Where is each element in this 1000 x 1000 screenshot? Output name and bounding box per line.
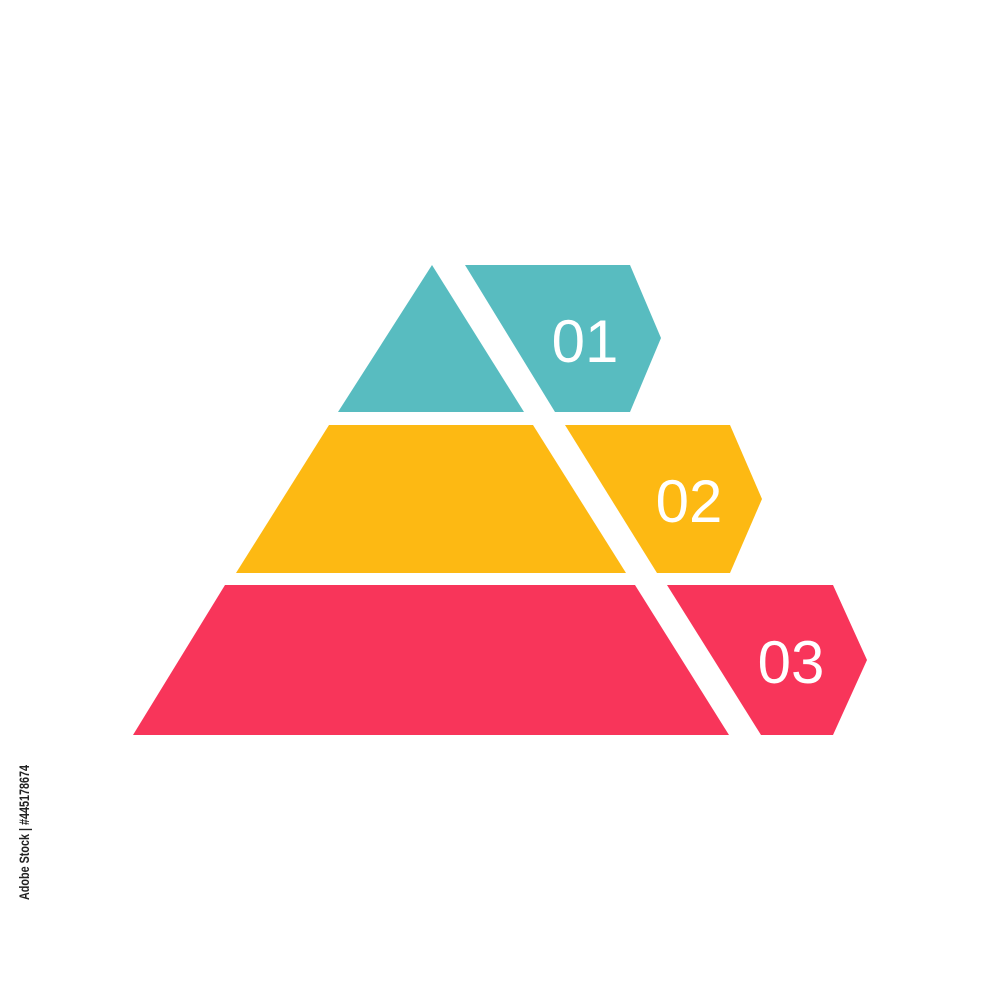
- pyramid tier 3: [133, 585, 867, 735]
- pyramid tier 1: [338, 265, 661, 412]
- stock id text: Adobe Stock | #445178674: [16, 765, 32, 900]
- label 01: 01: [552, 308, 618, 375]
- label 02: 02: [656, 468, 722, 535]
- pyramid tier 2: [236, 425, 762, 573]
- label 03: 03: [758, 629, 824, 696]
